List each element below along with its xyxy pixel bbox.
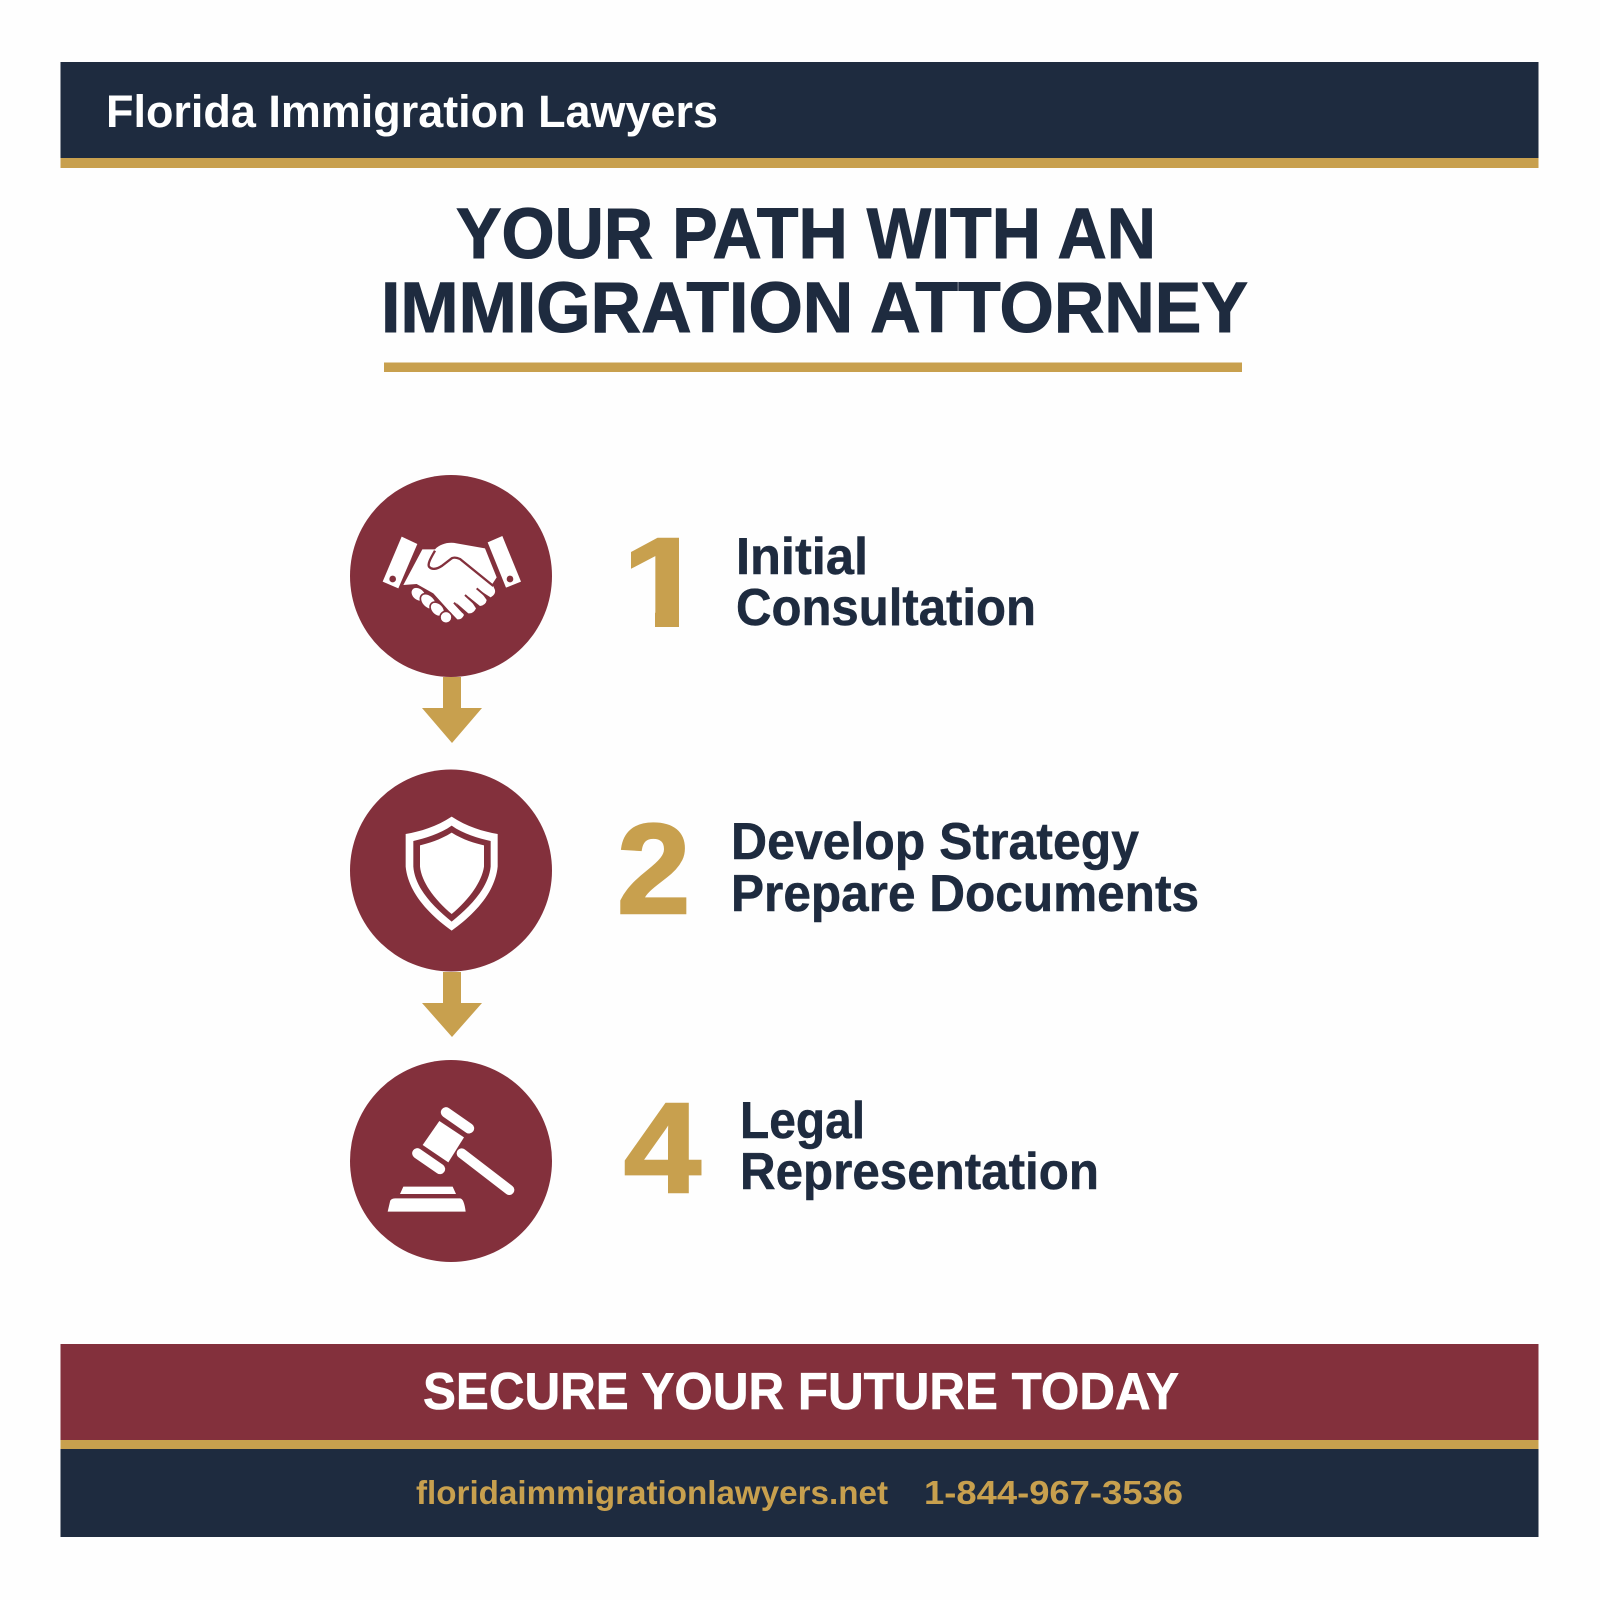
icon: gavel: [350, 1060, 552, 1262]
step label: initial consultation: Initial: [736, 528, 868, 586]
step label: develop strategy, prepare documents: Prepare Documents: [731, 865, 1199, 923]
title: IMMIGRATION ATTORNEY: [381, 269, 1248, 348]
step label: legal representation: Representation: [740, 1143, 1099, 1201]
step number 2: 2: [617, 797, 690, 941]
call to action band: [60, 1344, 1538, 1441]
title: [381, 195, 1248, 348]
title: YOUR PATH WITH AN: [456, 195, 1156, 274]
step 2: [350, 770, 1199, 972]
call to action band: SECURE YOUR FUTURE TODAY: [423, 1363, 1179, 1421]
header band: [60, 62, 1538, 168]
phone number: 1-844-967-3536: [924, 1474, 1183, 1511]
arrow 2: [422, 972, 482, 1037]
gold divider: [60, 1440, 1538, 1450]
step label: develop strategy, prepare documents: [731, 813, 1199, 923]
step label: initial consultation: [736, 528, 1036, 637]
step label: legal representation: [740, 1092, 1099, 1201]
step number 4: 4: [624, 1077, 701, 1220]
contact band: [60, 1449, 1538, 1537]
arrow 1: [422, 677, 482, 743]
icon: shield: [350, 770, 552, 972]
step 3: [350, 1060, 1099, 1262]
step label: initial consultation: Consultation: [736, 579, 1036, 637]
header brand name: Florida Immigration Lawyers: [106, 86, 718, 137]
website: floridaimmigrationlawyers.net: [416, 1474, 888, 1511]
step label: develop strategy, prepare documents: Develop Strategy: [731, 813, 1139, 871]
step number 1: 1: [621, 511, 706, 654]
step label: legal representation: Legal: [740, 1092, 865, 1150]
icon: handshake: [350, 475, 552, 677]
step 1: [350, 475, 1036, 677]
title underline: [384, 362, 1242, 372]
